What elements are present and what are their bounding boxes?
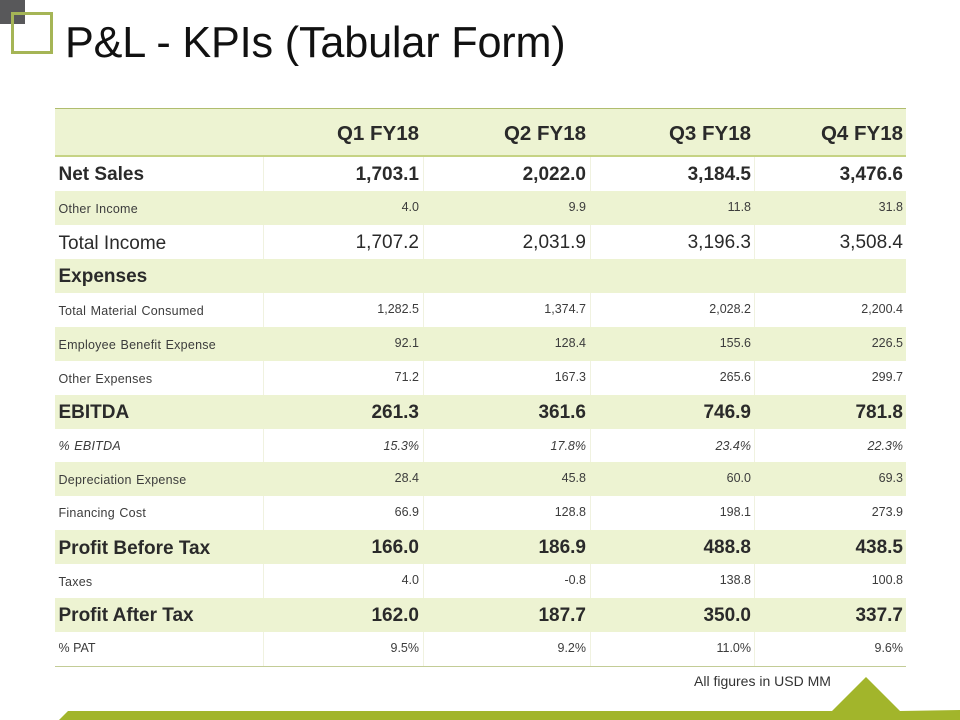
row: Financing Cost: 66.9	[395, 505, 419, 519]
row: Net Sales: 3,184.5	[688, 164, 751, 185]
row: Total Material Consumed: Total Material Consumed	[58, 304, 204, 318]
row: Other Expenses	[55, 361, 906, 395]
row: Taxes: 100.8	[872, 573, 903, 587]
row: Other Income: Other Income	[58, 202, 138, 216]
row: Other Income	[55, 191, 906, 225]
row: % EBITDA: 22.3%	[868, 438, 903, 452]
row: Total Material Consumed: 2,200.4	[861, 302, 903, 316]
row: Depreciation Expense: Depreciation Expense	[58, 473, 186, 487]
row: % PAT: % PAT	[58, 641, 96, 655]
header row: Q2 FY18	[504, 122, 586, 145]
row: Net Sales	[55, 157, 906, 191]
row: Expenses	[55, 259, 906, 293]
row: Employee Benefit Expense: 155.6	[720, 336, 751, 350]
row: EBITDA: 746.9	[703, 402, 751, 423]
row: Depreciation Expense	[55, 462, 906, 496]
row: Total Income	[55, 225, 906, 259]
row: Depreciation Expense: 69.3	[879, 471, 903, 485]
row: Profit Before Tax: 438.5	[855, 537, 903, 558]
row: Employee Benefit Expense	[55, 327, 906, 361]
row: Total Material Consumed: 1,374.7	[544, 302, 586, 316]
row: Financing Cost: 273.9	[872, 505, 903, 519]
row: % EBITDA	[55, 429, 906, 462]
row: Other Expenses: 167.3	[555, 370, 586, 384]
row: Employee Benefit Expense: 226.5	[872, 336, 903, 350]
row: Profit After Tax: 187.7	[538, 605, 586, 626]
row: Profit After Tax: 337.7	[855, 605, 903, 626]
row: Financing Cost: 198.1	[720, 505, 751, 519]
header row: Q4 FY18	[821, 122, 903, 145]
footer band with arrow	[59, 677, 960, 720]
row: Depreciation Expense: 45.8	[562, 471, 586, 485]
row: Profit Before Tax: 488.8	[703, 537, 751, 558]
row: Net Sales: Net Sales	[58, 164, 144, 185]
row: Financing Cost: 128.8	[555, 505, 586, 519]
row: Other Income: 31.8	[879, 200, 903, 214]
row: Total Income: 2,031.9	[523, 232, 586, 253]
row: Expenses: Expenses	[58, 266, 147, 287]
header row: Q1 FY18	[337, 122, 419, 145]
row: Profit After Tax: Profit After Tax	[58, 605, 194, 626]
row: Other Expenses: 299.7	[872, 370, 903, 384]
row: Total Material Consumed: 1,282.5	[377, 302, 419, 316]
row: Profit After Tax: 162.0	[371, 605, 419, 626]
title: P&L - KPIs (Tabular Form)	[65, 19, 566, 67]
row: Taxes: 138.8	[720, 573, 751, 587]
row: Other Income: 11.8	[728, 200, 751, 214]
row: Profit After Tax: 350.0	[703, 605, 751, 626]
row: Profit Before Tax: Profit Before Tax	[58, 538, 210, 559]
corner square	[0, 0, 25, 24]
row: Net Sales: 2,022.0	[523, 164, 586, 185]
row: % PAT: 9.6%	[874, 641, 903, 655]
row: EBITDA: EBITDA	[58, 402, 129, 423]
row: Employee Benefit Expense: 128.4	[555, 336, 586, 350]
row: Employee Benefit Expense: Employee Benefit Expense	[58, 338, 216, 352]
row: Other Expenses: 71.2	[395, 370, 419, 384]
row: Profit After Tax	[55, 598, 906, 632]
row: Total Income: 1,707.2	[356, 232, 419, 253]
row: Total Income: Total Income	[58, 233, 166, 254]
row: Financing Cost	[55, 496, 906, 530]
row: Total Income: 3,196.3	[688, 232, 751, 253]
table footnote: All figures in USD MM	[694, 673, 831, 689]
row: % PAT	[55, 632, 906, 667]
row: EBITDA: 261.3	[371, 402, 419, 423]
row: Financing Cost: Financing Cost	[58, 506, 146, 520]
row: % PAT: 9.2%	[558, 641, 586, 655]
row: EBITDA	[55, 395, 906, 429]
row: Other Expenses: Other Expenses	[58, 372, 152, 386]
row: Total Income: 3,508.4	[840, 232, 903, 253]
icon: outlined square	[11, 12, 53, 54]
row: Depreciation Expense: 60.0	[727, 471, 751, 485]
row: Net Sales: 3,476.6	[840, 164, 903, 185]
row: Taxes: 4.0	[402, 573, 419, 587]
header row	[55, 108, 906, 157]
row: Other Income: 4.0	[402, 200, 419, 214]
header row: Q3 FY18	[669, 122, 751, 145]
row: Employee Benefit Expense: 92.1	[395, 336, 419, 350]
row: Total Material Consumed: 2,028.2	[709, 302, 751, 316]
row: Depreciation Expense: 28.4	[395, 471, 419, 485]
row: % PAT: 9.5%	[390, 641, 419, 655]
row: Profit Before Tax	[55, 530, 906, 564]
row: EBITDA: 781.8	[855, 402, 903, 423]
row: % EBITDA: 17.8%	[551, 438, 586, 452]
row: Taxes	[55, 564, 906, 598]
row: Total Material Consumed	[55, 293, 906, 327]
row: Taxes: -0.8	[564, 573, 586, 587]
row: Net Sales: 1,703.1	[356, 164, 419, 185]
row: % PAT: 11.0%	[716, 641, 751, 655]
row: Profit Before Tax: 166.0	[371, 537, 419, 558]
row: Other Expenses: 265.6	[720, 370, 751, 384]
row: Taxes: Taxes	[58, 575, 92, 589]
row: % EBITDA: 23.4%	[716, 438, 751, 452]
row: EBITDA: 361.6	[538, 402, 586, 423]
row: % EBITDA: 15.3%	[384, 438, 419, 452]
row: Profit Before Tax: 186.9	[538, 537, 586, 558]
row: % EBITDA: % EBITDA	[58, 438, 121, 452]
row: Other Income: 9.9	[569, 200, 586, 214]
